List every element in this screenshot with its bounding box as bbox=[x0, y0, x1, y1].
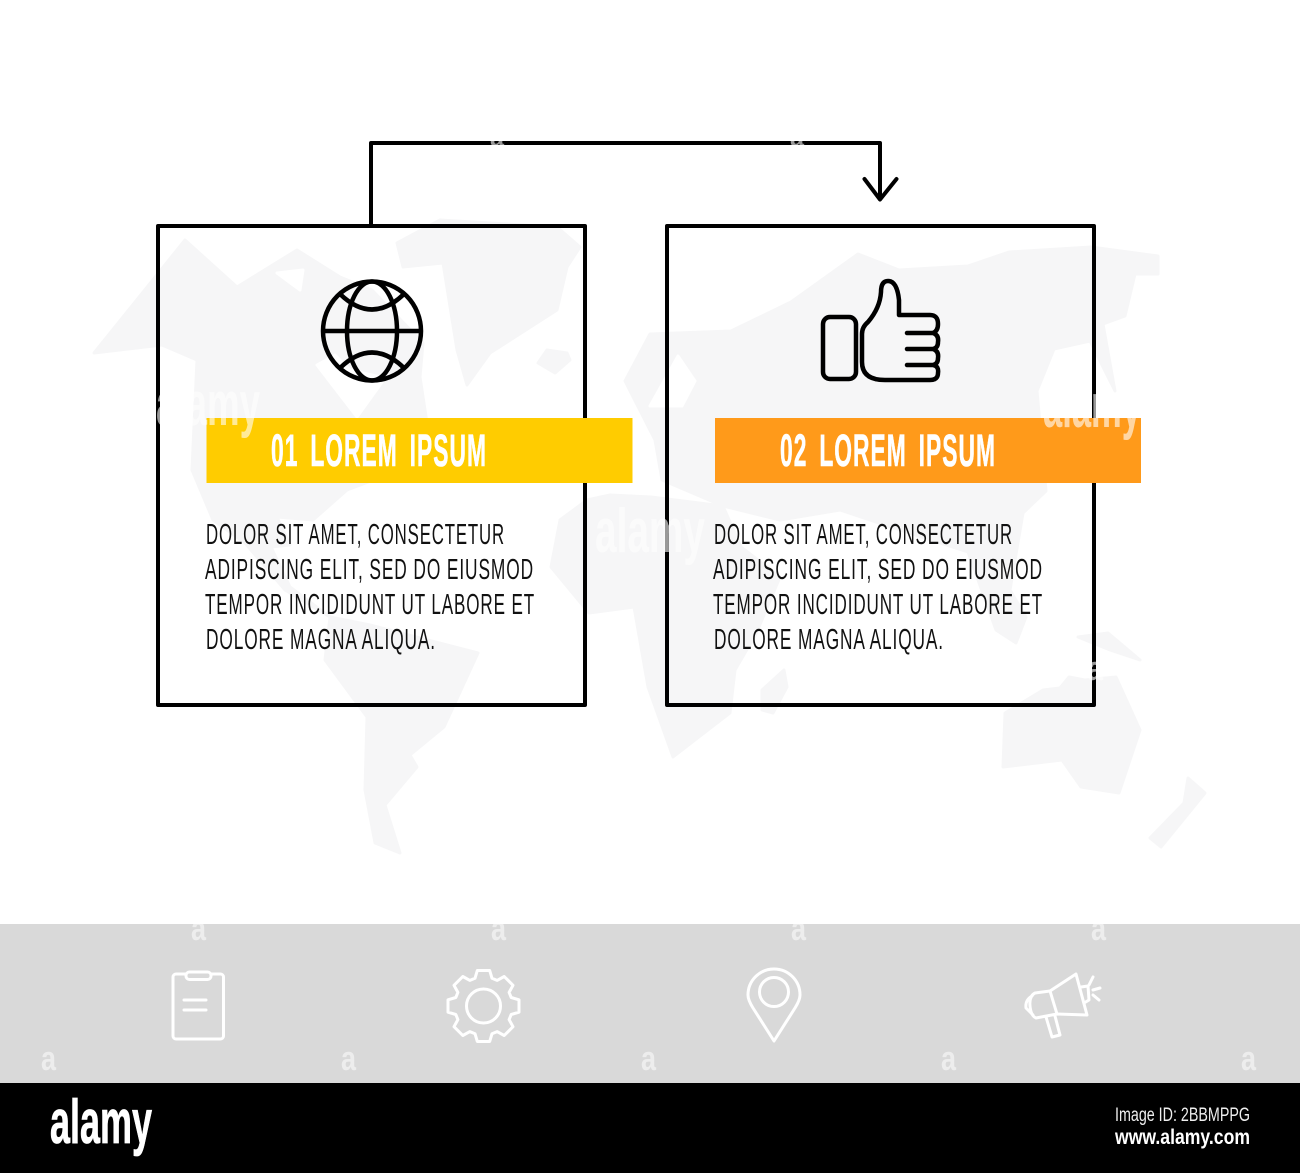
panel 1 frame bbox=[158, 226, 585, 705]
icon: globe bbox=[323, 282, 421, 380]
watermarks over panels: a bbox=[790, 125, 805, 152]
watermark letters on strip: a bbox=[641, 1040, 657, 1078]
text block 2 bbox=[713, 519, 1043, 656]
footer logo: alamy bbox=[50, 1088, 152, 1157]
icon: gear bbox=[448, 970, 519, 1042]
image id: Image ID: 2BBMPPG bbox=[1115, 1105, 1250, 1126]
text block 2: DOLORE MAGNA ALIQUA. bbox=[714, 624, 944, 656]
watermark letters on strip: a bbox=[341, 1040, 357, 1078]
panel 1: globe bbox=[158, 226, 632, 705]
heading bar 1 bbox=[206, 418, 632, 483]
text block 1 bbox=[205, 519, 535, 656]
icon: megaphone bbox=[1026, 974, 1100, 1037]
watermark letters on strip: a bbox=[941, 1040, 957, 1078]
heading bar 2: 02 LOREM IPSUM bbox=[780, 425, 996, 476]
watermarks over panels: a bbox=[1087, 650, 1104, 688]
icon: clipboard bbox=[173, 972, 224, 1039]
watermark letters on strip: a bbox=[191, 910, 207, 948]
panel 2 frame bbox=[667, 226, 1094, 705]
text block 1: TEMPOR INCIDIDUNT UT LABORE ET bbox=[205, 589, 535, 621]
watermarks over panels: alamy bbox=[156, 370, 260, 439]
heading bar 2 bbox=[715, 418, 1141, 483]
icon strip bbox=[0, 910, 1300, 1083]
panel 2: thumbs up bbox=[667, 226, 1141, 705]
footer bar bbox=[0, 1083, 1300, 1173]
watermark letters on strip bbox=[41, 910, 1257, 1078]
watermark letters on strip: a bbox=[1241, 1040, 1257, 1078]
watermark letters on strip: a bbox=[491, 910, 507, 948]
watermark letters on strip: a bbox=[41, 1040, 57, 1078]
watermarks over panels: alamy bbox=[1043, 372, 1141, 441]
text block 2: TEMPOR INCIDIDUNT UT LABORE ET bbox=[713, 589, 1043, 621]
watermark letters on strip: a bbox=[791, 910, 807, 948]
text block 1: DOLORE MAGNA ALIQUA. bbox=[206, 624, 436, 656]
icon: thumbs up bbox=[823, 281, 938, 380]
watermarks over panels: alamy bbox=[595, 497, 705, 566]
watermark letters on strip: a bbox=[1091, 910, 1107, 948]
text block 2: DOLOR SIT AMET, CONSECTETUR bbox=[714, 519, 1013, 551]
text block 2: ADIPISCING ELIT, SED DO EIUSMOD bbox=[713, 554, 1043, 586]
strip background bbox=[0, 924, 1300, 1083]
text block 1: ADIPISCING ELIT, SED DO EIUSMOD bbox=[205, 554, 534, 586]
watermarks over panels: a bbox=[490, 125, 505, 152]
text block 1: DOLOR SIT AMET, CONSECTETUR bbox=[206, 519, 505, 551]
heading bar 1: 01 LOREM IPSUM bbox=[271, 425, 487, 476]
icon: map pin bbox=[748, 969, 800, 1041]
watermarks over panels bbox=[156, 125, 1141, 688]
website: www.alamy.com bbox=[1114, 1126, 1250, 1149]
connector arrow between panels bbox=[371, 143, 896, 226]
world map background bbox=[94, 220, 1205, 853]
